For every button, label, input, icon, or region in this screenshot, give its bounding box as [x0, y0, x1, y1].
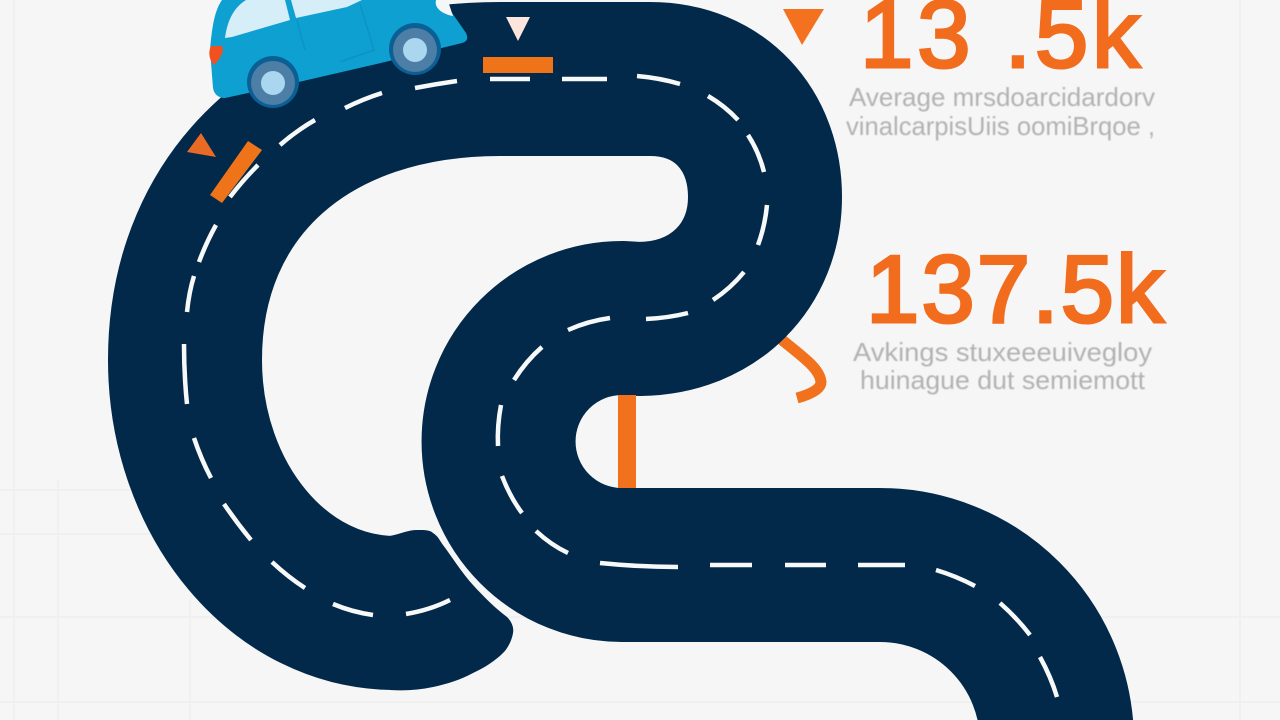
- car front window: [291, 0, 362, 18]
- car body: [210, 0, 467, 98]
- orange triangle left: [187, 133, 216, 157]
- stat description: [846, 82, 1155, 141]
- stat number: 137.5k: [866, 236, 1165, 343]
- car headlight: [436, 0, 453, 16]
- car rear window: [225, 0, 290, 38]
- winding road: [184, 76, 1057, 720]
- car tail light: [209, 46, 223, 65]
- pale triangle marker: [506, 17, 530, 41]
- orange triangle top right: [783, 9, 824, 45]
- stat description: vinalcarpisUiis oomiBrqoe ,: [846, 111, 1155, 141]
- stat description: Average mrsdoarcidardorv: [849, 82, 1155, 112]
- orange road marker top: [483, 57, 553, 73]
- orange hook: [781, 339, 821, 398]
- stat block: bottom: [853, 236, 1165, 395]
- front wheel: [389, 23, 441, 75]
- stat description: [853, 337, 1152, 395]
- stat description: Avkings stuxeeeuivegloy: [853, 337, 1152, 367]
- car door outline: [297, 4, 374, 62]
- road end cap: [390, 530, 513, 690]
- road centre dashes: [184, 76, 1057, 697]
- rear wheel: [247, 56, 299, 108]
- stat description: huinague dut semiemott: [860, 365, 1146, 395]
- stat block: top: [846, 0, 1155, 141]
- car: [209, 0, 467, 108]
- orange connector bar: [618, 395, 636, 488]
- orange slanted marker: [210, 141, 262, 203]
